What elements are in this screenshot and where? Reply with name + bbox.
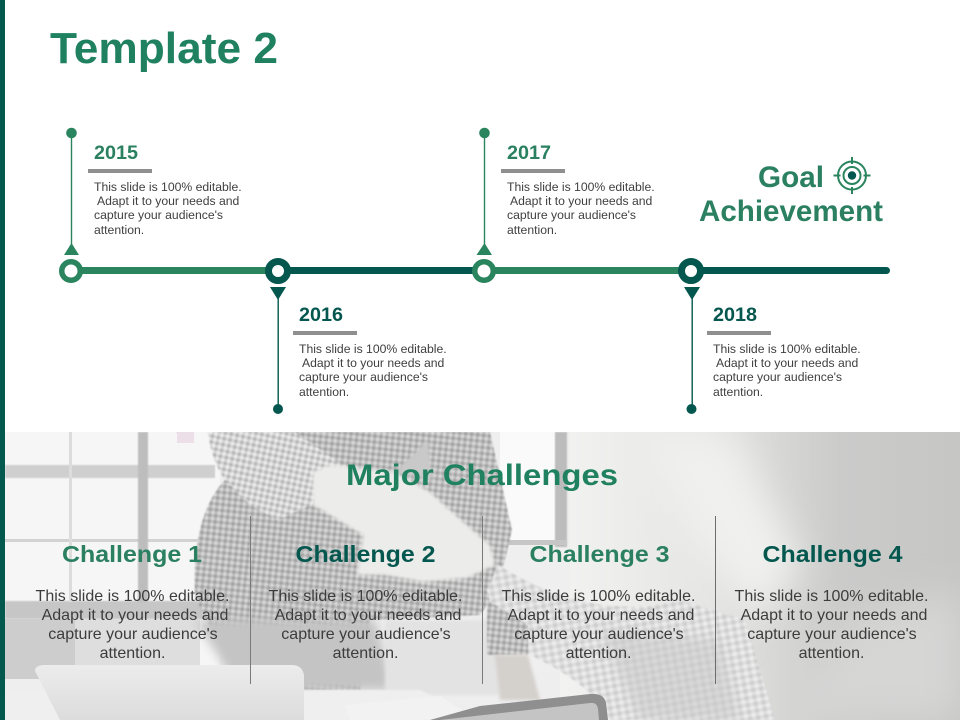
challenge 4: capture your audience's	[747, 626, 917, 643]
challenge 3: Adapt it to your needs and	[508, 607, 694, 624]
milestone: 2015: This slide is 100% editable.	[94, 180, 242, 194]
milestone: 2017	[475, 128, 655, 280]
milestone: 2018: Adapt it to your needs and	[716, 356, 858, 370]
challenge 1	[36, 541, 229, 662]
milestone: 2017: capture your audience's	[507, 208, 636, 222]
milestone: 2016	[268, 262, 447, 414]
challenge 3: This slide is 100% editable.	[502, 588, 695, 605]
challenge 1: This slide is 100% editable.	[36, 588, 229, 605]
challenge 4: attention.	[799, 645, 864, 662]
right sleeve	[487, 565, 775, 720]
milestone: 2018: 2018	[713, 305, 757, 326]
challenge 4	[735, 541, 928, 662]
left sleeve	[208, 432, 350, 520]
hands	[313, 465, 495, 582]
challenge 3: capture your audience's	[514, 626, 684, 643]
milestone: 2016: attention.	[299, 385, 349, 399]
challenge 2: Adapt it to your needs and	[275, 607, 461, 624]
challenge 4: Adapt it to your needs and	[741, 607, 927, 624]
milestone: 2015: capture your audience's	[94, 208, 223, 222]
laptops and desk	[304, 690, 426, 696]
panel: handshake photo background	[5, 432, 960, 720]
milestone: 2015	[62, 128, 242, 280]
challenge 2: Challenge 2	[296, 541, 436, 567]
title: Template 2	[50, 24, 278, 73]
milestone: 2018: attention.	[713, 385, 763, 399]
timeline line	[72, 267, 890, 274]
challenge 1: Adapt it to your needs and	[42, 607, 228, 624]
heading: goal achievement	[699, 161, 883, 228]
milestone: 2015: 2015	[94, 143, 138, 164]
challenge 1: capture your audience's	[48, 626, 218, 643]
milestone: 2015: attention.	[94, 223, 144, 237]
milestone: 2016: capture your audience's	[299, 370, 428, 384]
milestone: 2017: 2017	[507, 143, 551, 164]
challenge 1: Challenge 1	[62, 541, 202, 567]
challenge 3: attention.	[566, 645, 631, 662]
shirt torso	[195, 432, 512, 690]
milestone: 2016: 2016	[299, 305, 343, 326]
challenge 1: attention.	[100, 645, 165, 662]
icon: target	[834, 157, 870, 194]
milestone: 2015: Adapt it to your needs and	[97, 194, 239, 208]
challenge 4: Challenge 4	[762, 541, 903, 567]
column dividers	[250, 516, 716, 684]
challenge 3: Challenge 3	[530, 541, 670, 567]
challenge 3	[502, 541, 695, 662]
milestone: 2017: attention.	[507, 223, 557, 237]
challenge 4: This slide is 100% editable.	[735, 588, 928, 605]
left accent bar	[0, 0, 5, 720]
milestone: 2016: Adapt it to your needs and	[302, 356, 444, 370]
challenge 2: attention.	[333, 645, 398, 662]
milestone: 2017: Adapt it to your needs and	[510, 194, 652, 208]
milestone: 2018: This slide is 100% editable.	[713, 342, 861, 356]
milestone: 2017: This slide is 100% editable.	[507, 180, 655, 194]
milestone: 2018: capture your audience's	[713, 370, 842, 384]
challenge 2: capture your audience's	[281, 626, 451, 643]
milestone: 2016: This slide is 100% editable.	[299, 342, 447, 356]
challenge 2	[269, 541, 462, 662]
lower pants	[195, 620, 395, 690]
heading: major challenges: Major Challenges	[346, 459, 618, 492]
challenge 2: This slide is 100% editable.	[269, 588, 462, 605]
heading: goal achievement: Goal	[758, 161, 824, 194]
milestone: 2018	[682, 262, 861, 414]
heading: goal achievement: Achievement	[699, 195, 883, 228]
